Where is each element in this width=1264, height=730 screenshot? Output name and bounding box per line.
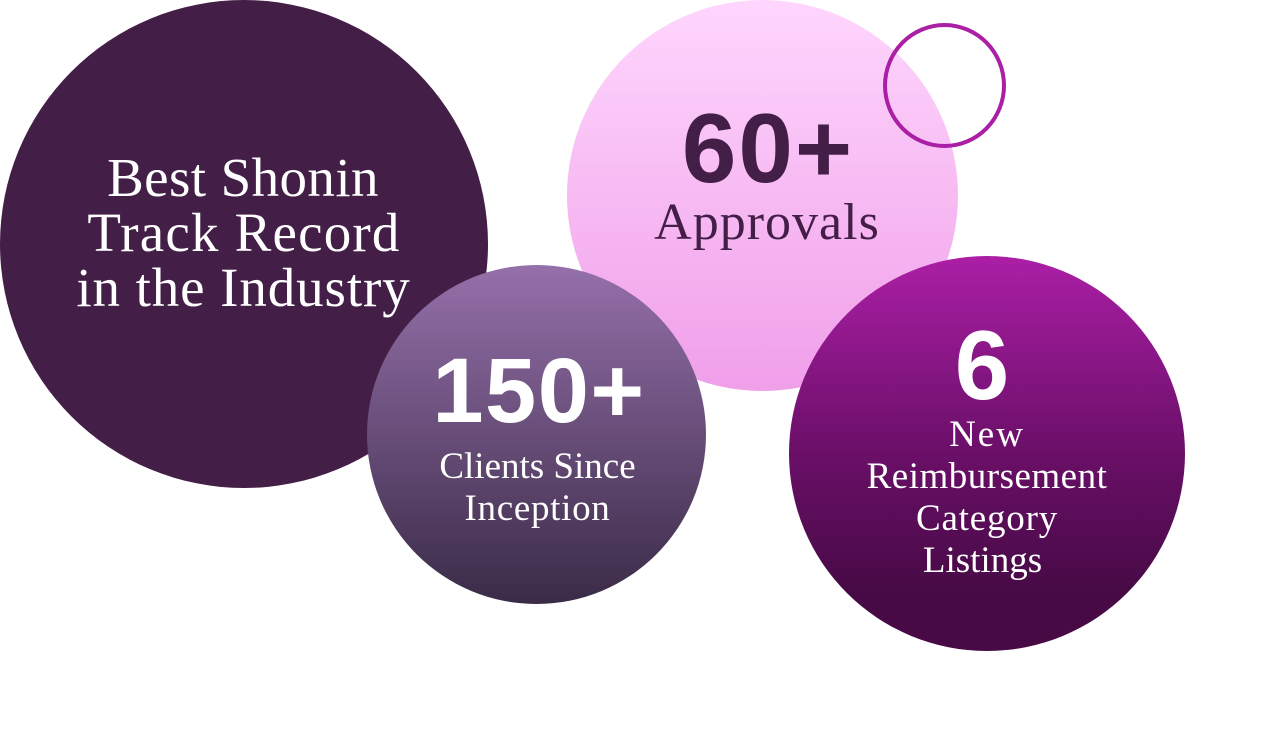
label: clients since inception: Inception: [464, 488, 611, 529]
stat: 150+: 150+: [432, 340, 646, 442]
stat: 60+: 60+: [682, 93, 854, 203]
label: approvals: Approvals: [654, 194, 880, 251]
label: new reimbursement category listings: New: [949, 414, 1025, 454]
label: new reimbursement category listings: Category: [916, 498, 1058, 538]
label: new reimbursement category listings: Listings: [923, 540, 1042, 580]
circle: best track record: [0, 0, 488, 488]
stat: 6: 6: [955, 310, 1009, 420]
label: new reimbursement category listings: Reimbursement: [867, 456, 1107, 496]
heading: best shonin track record: Best Shonin: [107, 147, 379, 208]
circle: clients: [367, 265, 706, 604]
heading: best shonin track record: Track Record: [87, 202, 401, 263]
heading: best shonin track record: [76, 147, 411, 318]
label: clients since inception: [439, 446, 636, 529]
heading: best shonin track record: in the Industry: [76, 257, 411, 318]
decorative ring: [883, 23, 1006, 148]
circle: reimbursement: [789, 256, 1185, 651]
label: clients since inception: Clients Since: [439, 446, 636, 487]
circle: approvals: [567, 0, 958, 391]
label: new reimbursement category listings: [867, 414, 1107, 580]
